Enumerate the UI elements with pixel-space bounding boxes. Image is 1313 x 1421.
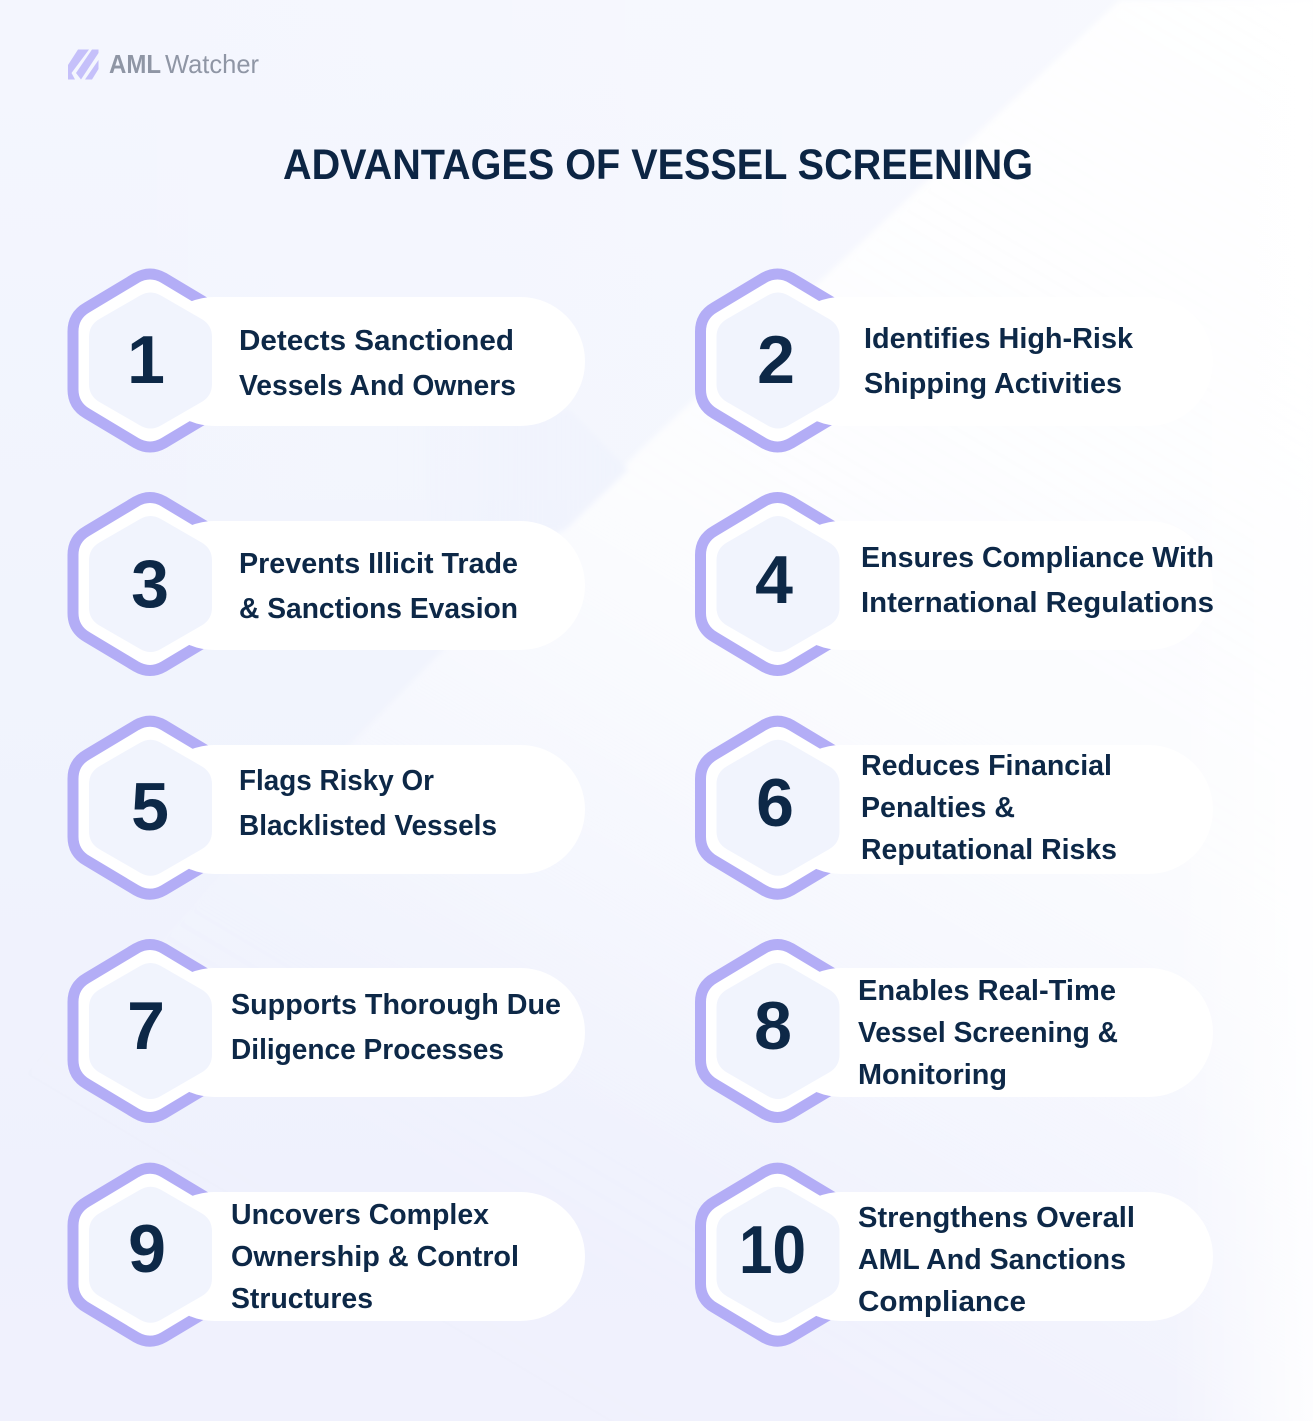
item 4: 4	[755, 542, 793, 618]
item 6: Penalties &	[861, 792, 1015, 824]
title: ADVANTAGES OF VESSEL SCREENING	[283, 141, 1033, 189]
item 9	[73, 1168, 585, 1341]
item 10: 10	[739, 1212, 806, 1288]
item 1: Detects Sanctioned	[239, 325, 514, 357]
item 6: 6	[756, 765, 794, 841]
item 7	[73, 944, 585, 1118]
item 7: Supports Thorough Due	[231, 989, 561, 1021]
logo	[68, 49, 259, 80]
item 6: Reputational Risks	[861, 834, 1117, 866]
item 5: Blacklisted Vessels	[239, 810, 497, 842]
logo: Watcher	[165, 49, 259, 79]
item 7: 7	[127, 988, 165, 1064]
item 5	[73, 721, 585, 894]
item 2: 2	[757, 322, 795, 398]
item 8: Vessel Screening &	[858, 1017, 1118, 1049]
item 2	[700, 274, 1213, 447]
item 6: Reduces Financial	[861, 750, 1112, 782]
item 4: International Regulations	[861, 587, 1214, 619]
item 8	[700, 944, 1213, 1118]
item 9: Uncovers Complex	[231, 1199, 489, 1231]
item 9: 9	[128, 1211, 166, 1287]
item 3: Prevents Illicit Trade	[239, 548, 518, 580]
wordmark: AML	[109, 49, 161, 79]
item 3: 3	[131, 546, 169, 622]
item 10: AML And Sanctions	[858, 1244, 1126, 1276]
item 3	[73, 498, 585, 670]
item 3: & Sanctions Evasion	[239, 593, 518, 625]
item 10: Compliance	[858, 1286, 1026, 1318]
item 5: 5	[131, 769, 169, 845]
item 10	[700, 1168, 1213, 1341]
item 8: Enables Real-Time	[858, 975, 1116, 1007]
item 6	[700, 721, 1213, 894]
item 2: Shipping Activities	[864, 368, 1122, 400]
item 2: Identifies High-Risk	[864, 323, 1134, 355]
icon: logo mark	[68, 50, 98, 80]
item 8: 8	[754, 988, 792, 1064]
item 5: Flags Risky Or	[239, 765, 434, 797]
item 9: Ownership & Control	[231, 1241, 519, 1273]
item 1	[73, 274, 585, 447]
item 8: Monitoring	[858, 1059, 1007, 1091]
item 1: 1	[127, 322, 165, 398]
item 4	[700, 498, 1214, 670]
item 9: Structures	[231, 1283, 373, 1315]
item 4: Ensures Compliance With	[861, 542, 1214, 574]
item 1: Vessels And Owners	[239, 370, 516, 402]
item 7: Diligence Processes	[231, 1034, 504, 1066]
item 10: Strengthens Overall	[858, 1202, 1135, 1234]
